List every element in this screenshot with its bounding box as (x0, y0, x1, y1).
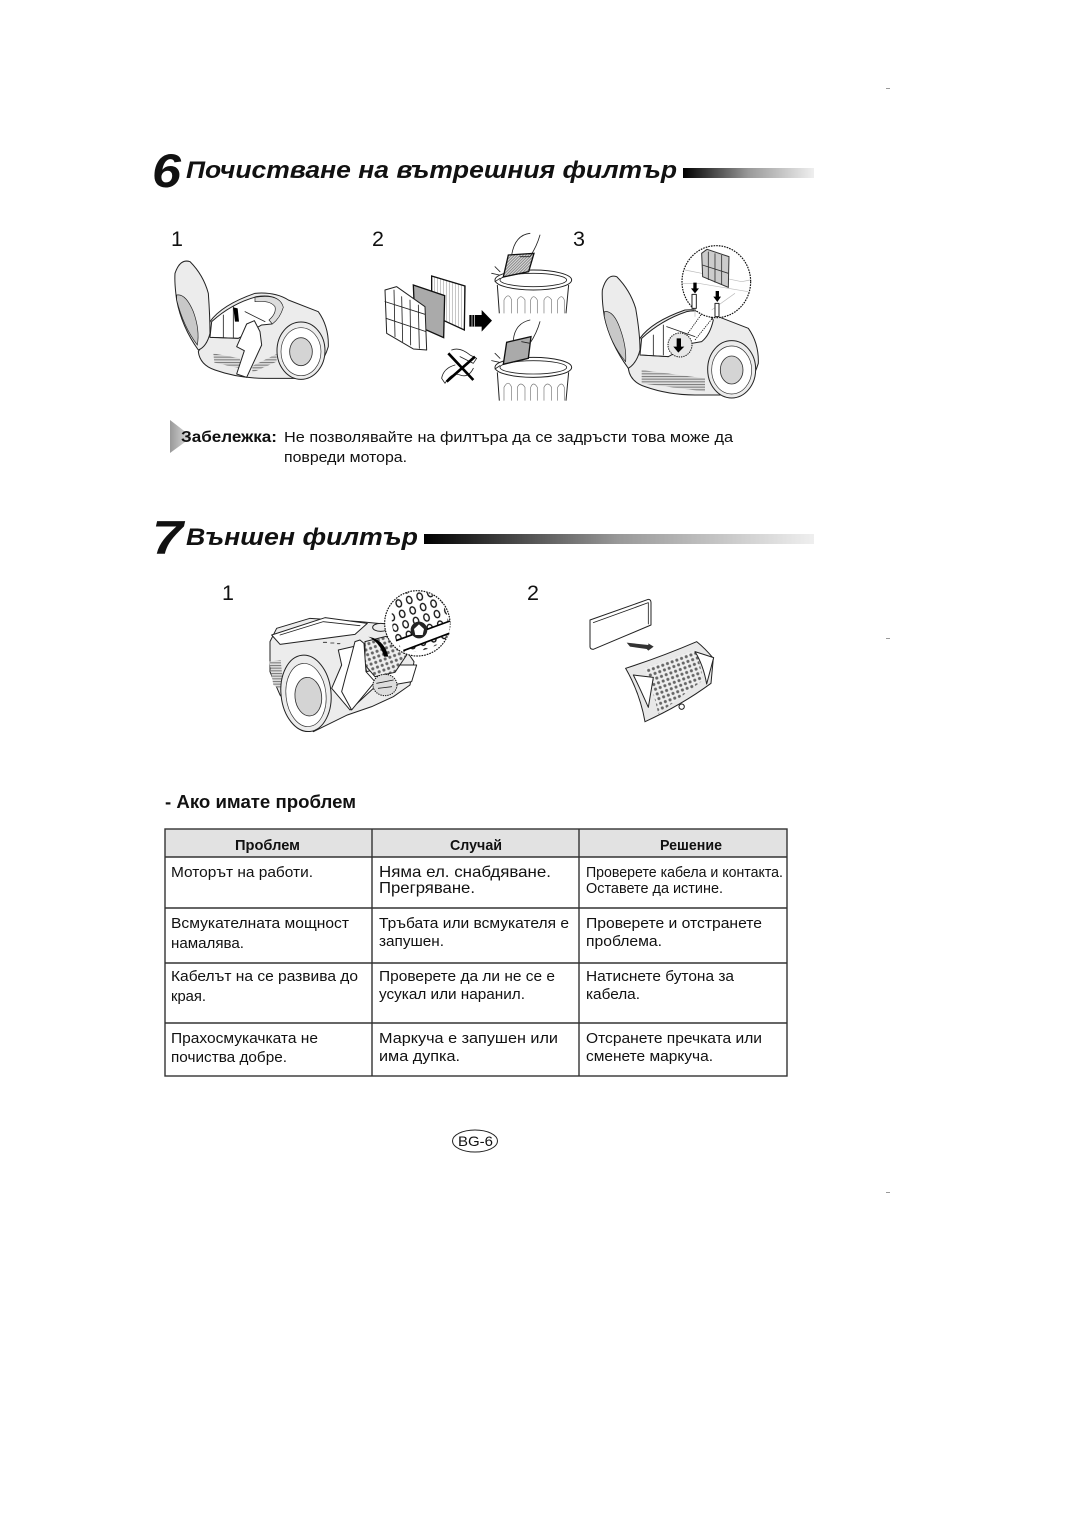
section 7 heading (152, 511, 814, 564)
page number: BG-6 (458, 1133, 493, 1149)
row 4: сменете маркуча. (586, 1048, 713, 1065)
arrow (368, 637, 388, 657)
row 3: усукал или наранил. (379, 986, 525, 1003)
row 4: Маркуча е запушен или (379, 1030, 558, 1047)
section 6 heading (152, 144, 814, 197)
step numbers, section 6: 3 (573, 227, 585, 251)
section 7 heading: Външен филтър (186, 524, 418, 551)
section 6 heading: Почистване на вътрешния филтър (186, 157, 677, 184)
row 1: Моторът на работи. (171, 864, 313, 881)
arrow (627, 643, 654, 651)
callout: filter latch detail (385, 591, 450, 656)
row 2: Всмукателната мощност (171, 915, 349, 932)
row 2: Тръбата или всмукателя е (379, 915, 569, 932)
callout: filter placement detail (668, 246, 751, 357)
row 3: Проверете да ли не се е (379, 968, 555, 985)
row 3 (171, 968, 735, 1005)
step numbers, section 7: 1 (222, 581, 234, 605)
section 7 heading: 7 (152, 511, 185, 564)
icon: bin with filter, bottom (492, 320, 572, 401)
table header (165, 829, 787, 857)
row 4: има дупка. (379, 1048, 460, 1065)
arrow (469, 310, 492, 332)
row 1: Оставете да истине. (586, 880, 723, 897)
row 3: края. (171, 988, 206, 1005)
table header: Случай (450, 838, 502, 854)
row 2: проблема. (586, 933, 662, 950)
illustration: filter pad and grille (590, 599, 714, 722)
step numbers, section 7: 2 (527, 581, 539, 605)
section 6 heading: 6 (152, 144, 182, 197)
icon: pleated filter (432, 276, 465, 330)
row 2 (171, 915, 762, 952)
icon: bin with filter, top (492, 233, 572, 313)
row 2: Проверете и отстранете (586, 915, 762, 932)
subheading: troubleshooting: - Ако имате проблем (165, 792, 356, 812)
row 3: Натиснете бутона за (586, 968, 735, 985)
hand (342, 640, 375, 710)
icon: grille (626, 642, 714, 722)
illustration: three filter layers, arrow and bins (385, 233, 572, 401)
illustration: vacuum, filter being reinserted (602, 246, 758, 398)
illustration: removing outer filter from vacuum (269, 591, 450, 734)
row 4 (171, 1030, 762, 1066)
row 4: Отсранете пречката или (586, 1030, 762, 1047)
crop marks (886, 88, 890, 1193)
row 1 (171, 864, 783, 897)
note: Забележка: (181, 429, 277, 446)
filter grille (365, 635, 407, 677)
icon: filter pad (590, 599, 651, 649)
step numbers, section 6: 2 (372, 227, 384, 251)
icon: filter frame (385, 287, 427, 350)
illustration: vacuum with open lid, hand removing filter (175, 261, 328, 379)
note (170, 420, 734, 466)
row 1: Няма ел. снабдяване. (379, 864, 551, 881)
step numbers, section 7 (222, 581, 539, 605)
page number (452, 1130, 498, 1152)
row 4: Прахосмукачката не (171, 1030, 318, 1047)
table header: Решение (660, 838, 722, 854)
table header: Проблем (235, 838, 300, 854)
icon: note triangle (170, 420, 192, 453)
icon: do not wash (442, 349, 477, 383)
row 3: Кабелът на се развива до (171, 968, 358, 985)
row 1: Проверете кабела и контакта. (586, 864, 783, 881)
note: Не позволявайте на филтъра да се задръсти това може да (284, 429, 734, 446)
row 2: намалява. (171, 935, 244, 952)
icon: sponge filter (413, 285, 445, 338)
step numbers, section 6: 1 (171, 227, 183, 251)
troubleshooting table (165, 829, 787, 1076)
row 1: Прегряване. (379, 880, 475, 897)
note: повреди мотора. (284, 449, 407, 466)
row 3: кабела. (586, 986, 640, 1003)
row 2: запушен. (379, 933, 444, 950)
step numbers, section 6 (171, 227, 585, 251)
table grid (165, 829, 787, 1076)
row 4: почиства добре. (171, 1049, 287, 1066)
